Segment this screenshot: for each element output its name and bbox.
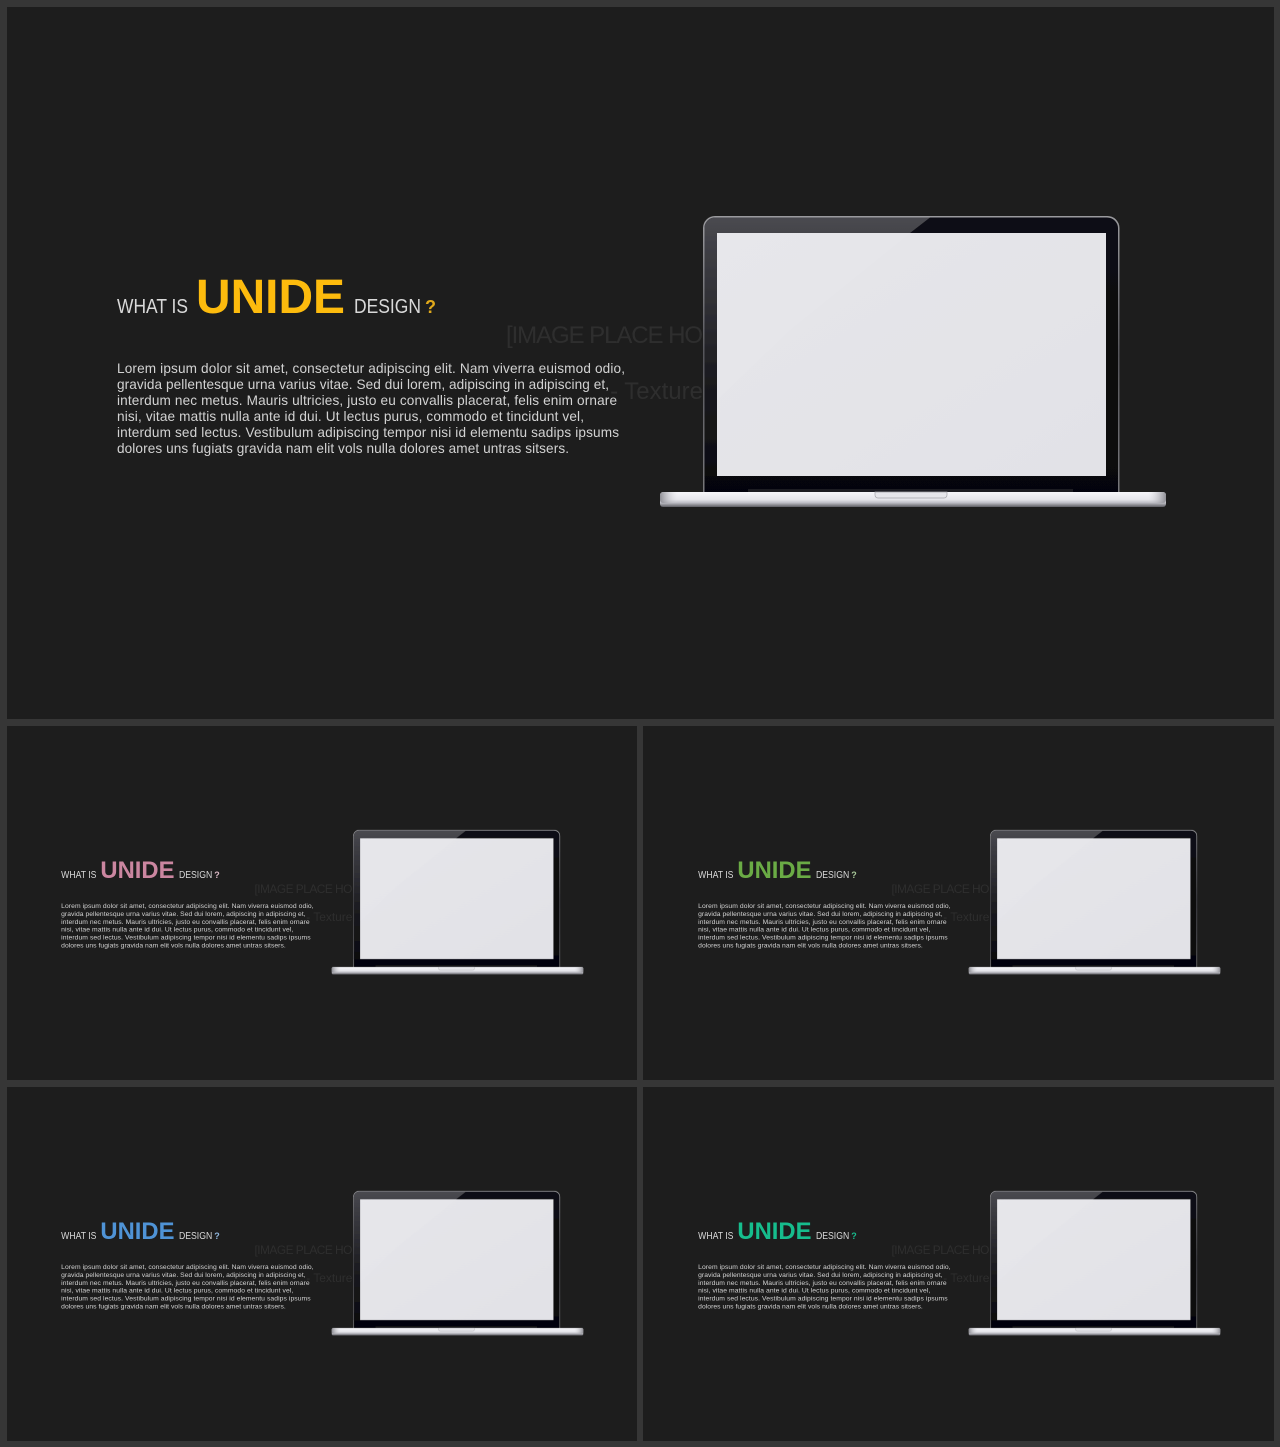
ghost placeholder text: - Texture (610, 378, 703, 405)
laptop (969, 830, 1220, 974)
ghost placeholder text: [IMAGE PLACE HO (506, 322, 703, 349)
ghost placeholder text: [IMAGE PLACE HO (254, 1243, 352, 1257)
title: DESIGN (179, 1231, 212, 1242)
body text: nisi, vitae mattis nulla ante id dui. Ut lectus purus, commodo et tincidunt vel, (61, 927, 293, 934)
body text: dolores uns fugiats gravida nam elit vols nulla dolores amet untras sitsers. (698, 943, 923, 950)
ghost placeholder text: - Texture (943, 1271, 990, 1285)
title: WHAT IS (61, 1231, 97, 1242)
panel background (7, 7, 1274, 719)
body text: interdum sed lectus. Vestibulum adipiscing tempor nisi id elementu sadips ipsums (698, 935, 948, 942)
title: UNIDE (100, 857, 174, 884)
ghost placeholder text: [IMAGE PLACE HO (254, 882, 352, 896)
body text: interdum nec metus. Mauris ultricies, justo eu convallis placerat, felis enim ornare (117, 393, 617, 408)
panel background (643, 1087, 1274, 1441)
title: WHAT IS (117, 296, 188, 318)
panel: green slide (643, 726, 1274, 1080)
title: DESIGN (816, 1231, 849, 1242)
body text: nisi, vitae mattis nulla ante id dui. Ut lectus purus, commodo et tincidunt vel, (698, 927, 930, 934)
title (61, 1218, 220, 1245)
body text (698, 1264, 951, 1311)
title: WHAT IS (61, 870, 97, 881)
ghost placeholder text: [IMAGE PLACE HO (891, 1243, 989, 1257)
body text: dolores uns fugiats gravida nam elit vols nulla dolores amet untras sitsers. (698, 1304, 923, 1311)
title: UNIDE (196, 271, 345, 324)
title: DESIGN (354, 296, 421, 318)
ghost placeholder text (891, 1243, 990, 1285)
title: ? (214, 1231, 220, 1241)
body text: Lorem ipsum dolor sit amet, consectetur adipiscing elit. Nam viverra euismod odio, (698, 1264, 951, 1271)
panel background (643, 726, 1274, 1080)
ghost placeholder text: [IMAGE PLACE HO (891, 882, 989, 896)
body text: interdum nec metus. Mauris ultricies, justo eu convallis placerat, felis enim ornare (698, 919, 947, 926)
body text: nisi, vitae mattis nulla ante id dui. Ut lectus purus, commodo et tincidunt vel, (117, 409, 584, 424)
panel: main yellow slide (7, 7, 1274, 719)
body text: dolores uns fugiats gravida nam elit vols nulla dolores amet untras sitsers. (61, 1304, 286, 1311)
ghost placeholder text: - Texture (306, 910, 353, 924)
title (698, 857, 857, 884)
body text: nisi, vitae mattis nulla ante id dui. Ut lectus purus, commodo et tincidunt vel, (698, 1288, 930, 1295)
body text: Lorem ipsum dolor sit amet, consectetur adipiscing elit. Nam viverra euismod odio, (698, 903, 951, 910)
body text: Lorem ipsum dolor sit amet, consectetur adipiscing elit. Nam viverra euismod odio, (61, 1264, 314, 1271)
body text: Lorem ipsum dolor sit amet, consectetur adipiscing elit. Nam viverra euismod odio, (61, 903, 314, 910)
laptop (332, 1191, 583, 1335)
slide content (698, 1191, 1220, 1335)
title: WHAT IS (698, 1231, 734, 1242)
ghost placeholder text (254, 882, 353, 924)
body text (61, 1264, 314, 1311)
title: ? (214, 870, 220, 880)
title (61, 857, 220, 884)
title: UNIDE (737, 857, 811, 884)
panel: teal slide (643, 1087, 1274, 1441)
panel: blue slide (7, 1087, 637, 1441)
ghost placeholder text: - Texture (943, 910, 990, 924)
body text: interdum sed lectus. Vestibulum adipiscing tempor nisi id elementu sadips ipsums (61, 1296, 311, 1303)
title: ? (425, 297, 436, 317)
body text: interdum sed lectus. Vestibulum adipiscing tempor nisi id elementu sadips ipsums (698, 1296, 948, 1303)
panel background (7, 726, 637, 1080)
slide content (698, 830, 1220, 974)
body text (61, 903, 314, 950)
body text: dolores uns fugiats gravida nam elit vols nulla dolores amet untras sitsers. (117, 441, 569, 456)
slide content (61, 830, 583, 974)
ghost placeholder text (254, 1243, 353, 1285)
title: UNIDE (100, 1218, 174, 1245)
panel: pink slide (7, 726, 637, 1080)
slide content (117, 216, 1166, 507)
body text: gravida pellentesque urna varius vitae. Sed dui lorem, adipiscing in adipiscing et, (61, 1272, 306, 1279)
title: ? (851, 870, 857, 880)
title: WHAT IS (698, 870, 734, 881)
body text: dolores uns fugiats gravida nam elit vols nulla dolores amet untras sitsers. (61, 943, 286, 950)
laptop (660, 216, 1166, 507)
ghost placeholder text (891, 882, 990, 924)
title (698, 1218, 857, 1245)
body text: interdum sed lectus. Vestibulum adipiscing tempor nisi id elementu sadips ipsums (117, 425, 619, 440)
body text: Lorem ipsum dolor sit amet, consectetur adipiscing elit. Nam viverra euismod odio, (117, 361, 625, 376)
title (117, 271, 436, 324)
body text (698, 903, 951, 950)
body text: gravida pellentesque urna varius vitae. Sed dui lorem, adipiscing in adipiscing et, (117, 377, 609, 392)
laptop (332, 830, 583, 974)
body text: nisi, vitae mattis nulla ante id dui. Ut lectus purus, commodo et tincidunt vel, (61, 1288, 293, 1295)
ghost placeholder text (506, 322, 703, 405)
title: ? (851, 1231, 857, 1241)
title: DESIGN (816, 870, 849, 881)
body text: interdum nec metus. Mauris ultricies, justo eu convallis placerat, felis enim ornare (698, 1280, 947, 1287)
body text: gravida pellentesque urna varius vitae. Sed dui lorem, adipiscing in adipiscing et, (698, 911, 943, 918)
body text: gravida pellentesque urna varius vitae. Sed dui lorem, adipiscing in adipiscing et, (698, 1272, 943, 1279)
ghost placeholder text: - Texture (306, 1271, 353, 1285)
title: UNIDE (737, 1218, 811, 1245)
body text: gravida pellentesque urna varius vitae. Sed dui lorem, adipiscing in adipiscing et, (61, 911, 306, 918)
body text: interdum nec metus. Mauris ultricies, justo eu convallis placerat, felis enim ornare (61, 1280, 310, 1287)
slide content (61, 1191, 583, 1335)
title: DESIGN (179, 870, 212, 881)
panel background (7, 1087, 637, 1441)
body text: interdum nec metus. Mauris ultricies, justo eu convallis placerat, felis enim ornare (61, 919, 310, 926)
laptop (969, 1191, 1220, 1335)
body text: interdum sed lectus. Vestibulum adipiscing tempor nisi id elementu sadips ipsums (61, 935, 311, 942)
body text (117, 361, 625, 456)
